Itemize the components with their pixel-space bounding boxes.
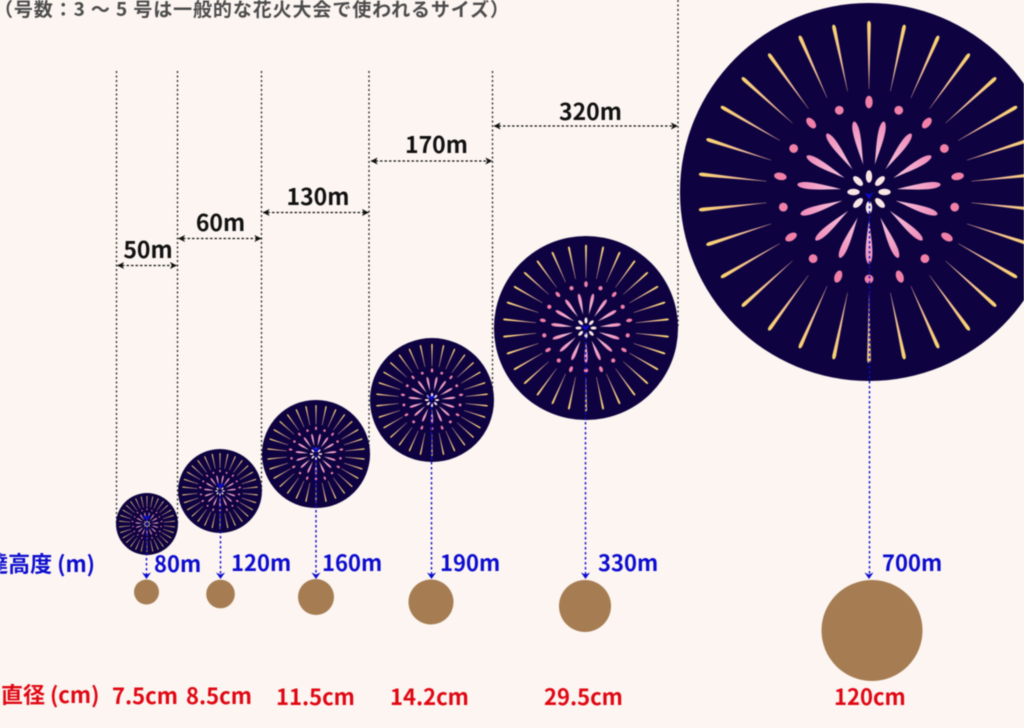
shell: 7.5cm (134, 580, 159, 604)
firework: 20号 (680, 3, 1024, 381)
firework: 3号 (116, 493, 178, 555)
dimension arrow: 50m (118, 264, 176, 266)
shell: 11.5cm (298, 579, 334, 615)
altitude arrows (142, 192, 874, 579)
altitude value: 330m: 330m (598, 546, 658, 578)
label: 130m: 130m (287, 178, 349, 212)
diameter value: 7.5cm: 7.5cm (112, 679, 178, 711)
shell: 120cm (822, 580, 922, 681)
shell: 8.5cm (206, 580, 235, 608)
dimension arrow: 320m (494, 125, 678, 127)
label: 320m: 320m (559, 93, 622, 127)
diameter value: 29.5cm: 29.5cm (544, 680, 623, 712)
diameter value: 14.2cm: 14.2cm (390, 680, 469, 712)
dimension arrow: 60m (178, 238, 261, 240)
altitude value: 190m: 190m (440, 546, 500, 578)
firework: 10号 (494, 236, 678, 420)
label: 50m: 50m (123, 231, 173, 265)
firework: 6号 (370, 338, 494, 462)
shell: 14.2cm (408, 580, 454, 624)
shell: 29.5cm (559, 580, 611, 632)
altitude value: 700m: 700m (882, 546, 942, 578)
altitude value: 120m: 120m (231, 546, 291, 578)
label: 60m: 60m (196, 204, 245, 238)
firework: 4号 (178, 449, 262, 533)
label: 170m: 170m (405, 126, 468, 160)
firework: 5号 (262, 400, 370, 508)
altitude value: 160m: 160m (322, 546, 382, 578)
dotted extension lines (116, 0, 678, 524)
dimension arrow: 130m (263, 212, 368, 214)
altitude value: 80m: 80m (154, 547, 201, 579)
axis label: diameter: 直径 (cm) (1, 678, 99, 710)
diameter value: 11.5cm: 11.5cm (276, 680, 355, 712)
diameter value: 120cm: 120cm (834, 680, 906, 712)
dimension arrow: 170m (371, 160, 492, 162)
diameter value: 8.5cm: 8.5cm (186, 679, 252, 711)
